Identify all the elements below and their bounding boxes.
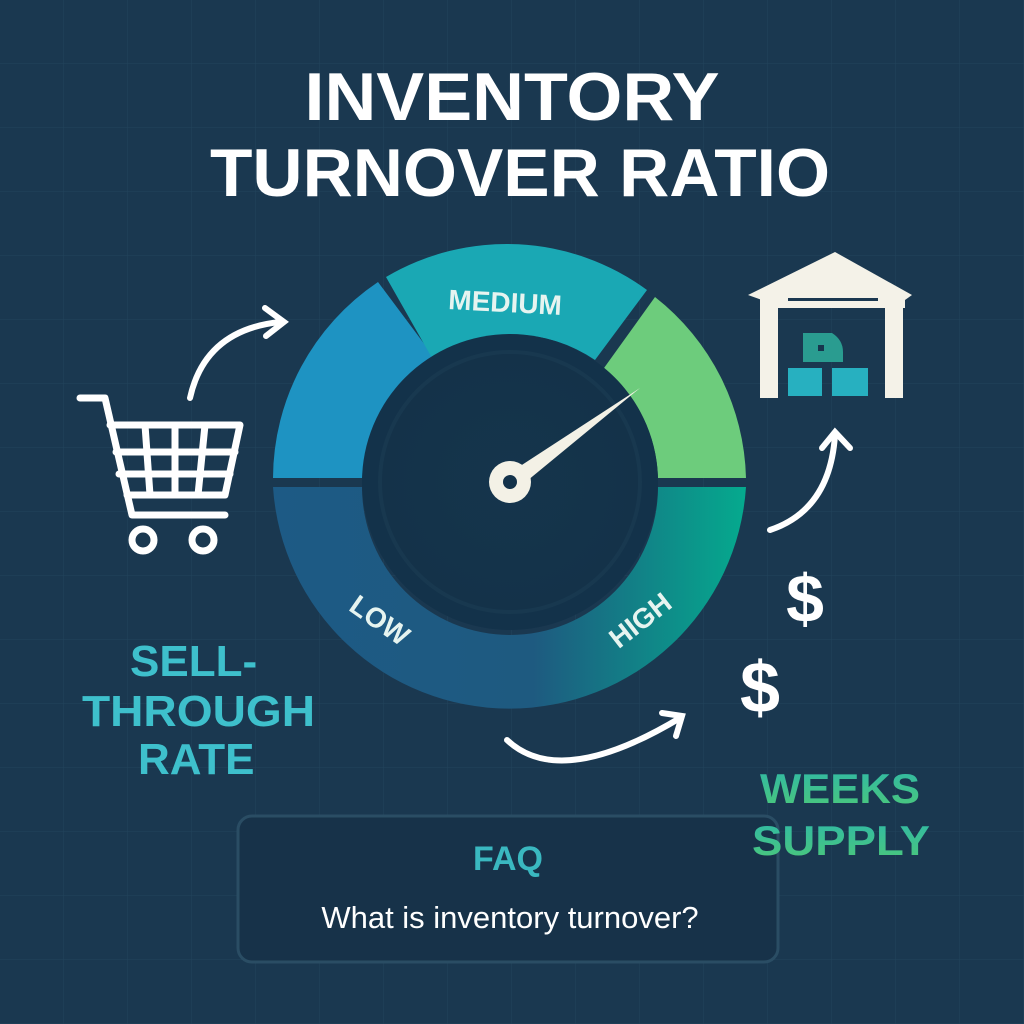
text: weeks supply: WEEKS	[760, 765, 920, 812]
icon: dollar signs: $	[786, 561, 824, 637]
arrow: up to warehouse	[770, 432, 850, 530]
icon: dollar signs	[740, 561, 824, 728]
arrow: bottom	[507, 713, 682, 760]
text: sell-through rate: SELL-	[130, 637, 257, 686]
icon: dollar signs: $	[740, 648, 780, 728]
text: sell-through rate	[82, 637, 315, 784]
needle	[505, 388, 640, 490]
title: INVENTORY	[304, 59, 720, 135]
icon: warehouse	[748, 252, 912, 398]
icon: shopping cart	[80, 398, 240, 551]
gauge	[273, 244, 746, 709]
title: TURNOVER RATIO	[210, 135, 830, 211]
text: weeks supply: SUPPLY	[752, 817, 930, 864]
gauge: HIGH	[603, 587, 677, 654]
title	[210, 59, 830, 211]
panel: FAQ	[238, 816, 778, 962]
arrow: cart to gauge	[190, 308, 284, 398]
gauge labels: MEDIUM	[448, 284, 563, 321]
text: weeks supply	[752, 765, 930, 864]
panel: FAQ: FAQ	[473, 840, 543, 878]
panel: FAQ: What is inventory turnover?	[321, 900, 699, 935]
text: sell-through rate: THROUGH	[82, 687, 315, 736]
text: sell-through rate: RATE	[138, 735, 255, 784]
gauge: LOW	[344, 589, 416, 652]
